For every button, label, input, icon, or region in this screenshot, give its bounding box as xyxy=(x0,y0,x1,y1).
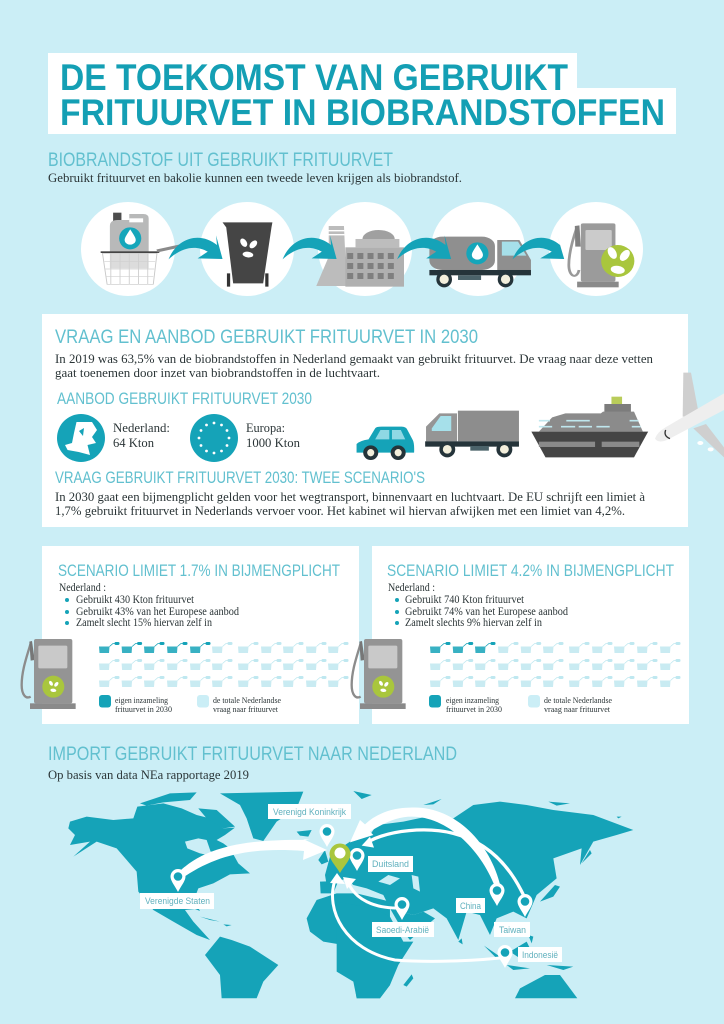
text block: 2019 xyxy=(55,351,653,380)
label: Verenigd Koninkrijk: Verenigd Koninkrijk xyxy=(273,807,346,817)
icon: recycling bin xyxy=(223,222,272,287)
list: scenario 1.7%: Gebruikt 430 Kton frituurvet xyxy=(76,594,195,606)
list: scenario 4.2%: Gebruikt 74% van het Europese aanbod xyxy=(405,606,568,618)
label: Indonesië: Indonesië xyxy=(522,950,558,960)
list: scenario 4.2%: Nederland : xyxy=(388,582,435,594)
icon: truck xyxy=(425,411,519,457)
list: scenario 1.7%: Nederland : xyxy=(59,582,106,594)
panel: vraag en aanbod xyxy=(42,314,688,527)
legend: scenario 1.7% xyxy=(99,695,281,714)
arrow: Indonesië xyxy=(330,873,500,961)
list: scenario 1.7%: Zamelt slecht 15% hiervan zelf in xyxy=(76,617,212,629)
title: FRITUURVET IN BIOBRANDSTOFFEN xyxy=(60,92,665,133)
Greenland xyxy=(220,792,303,841)
Arabia xyxy=(390,908,435,940)
label: Duitsland: Duitsland xyxy=(372,859,409,869)
arrow 4 xyxy=(512,235,564,259)
icon: car xyxy=(357,427,414,460)
Japan xyxy=(540,850,592,902)
text block: 2019: In 2019 was 63,5% van de biobrandstoffen in Nederland gemaakt van gebruikt frituurvet. De vraag naar deze vetten xyxy=(55,351,653,366)
legend: scenario 1.7%: eigen inzameling xyxy=(115,695,169,705)
pin: Verenigd Koninkrijk xyxy=(320,824,334,847)
list: scenario 1.7%: Gebruikt 43% van het Europese aanbod xyxy=(76,606,239,618)
legend: scenario 1.7%: frituurvet in 2030 xyxy=(115,704,172,714)
text: Nederland aanbod: Nederland: xyxy=(113,420,170,435)
world map xyxy=(68,791,633,998)
icon: pump xyxy=(22,639,76,709)
Eurasia xyxy=(325,802,633,940)
arrow: Verenigde Staten xyxy=(175,839,327,879)
arrow: Saoedi-Arabië xyxy=(343,877,397,908)
Islands SE Asia xyxy=(484,942,573,970)
Africa xyxy=(307,893,390,998)
label: Verenigd Koninkrijk xyxy=(268,804,351,819)
icon: factory xyxy=(316,226,404,287)
text block: bijmengplicht: In 2030 gaat een bijmengplicht gelden voor het wegtransport, binnenvaart en luchtvaart. De EU schrijft een limiet à xyxy=(55,489,645,504)
pin: China xyxy=(490,883,504,906)
legend: scenario 1.7%: de totale Nederlandse xyxy=(213,695,281,705)
panel: scenario 1.7% xyxy=(22,546,359,724)
icon: jerrycan and basket xyxy=(101,213,180,284)
Australia xyxy=(515,975,577,998)
icon: Europa xyxy=(190,414,238,462)
icon: tanker truck xyxy=(429,237,531,287)
chart: baskets 4.2% xyxy=(430,642,680,687)
title: DE TOEKOMST VAN GEBRUIKT xyxy=(60,57,568,98)
Hudson Bay xyxy=(185,838,220,857)
Iberia xyxy=(320,881,338,893)
legend: scenario 4.2%: de totale Nederlandse xyxy=(544,695,612,705)
pin: Taiwan xyxy=(518,894,532,917)
list: scenario 4.2%: Zamelt slechts 9% hiervan zelf in xyxy=(405,617,542,629)
label: China: China xyxy=(460,901,481,911)
text block: bijmengplicht: 1,7% gebruikt frituurvet in Nederlands vervoer voor. Het kabinet wil hiervan afwijken met een limiet van 4,2%. xyxy=(55,503,625,518)
heading: vraag en aanbod: VRAAG EN AANBOD GEBRUIKT FRITUURVET IN 2030 xyxy=(55,326,478,348)
icon: Nederland xyxy=(57,414,105,462)
arrow 1 xyxy=(169,235,223,259)
text: bron: Op basis van data NEa rapportage 2019 xyxy=(48,768,249,782)
text: Nederland aanbod: 64 Kton xyxy=(113,435,154,450)
list: scenario 4.2% xyxy=(388,582,568,629)
pin: Duitsland xyxy=(350,848,364,871)
label: Indonesië xyxy=(518,947,562,962)
text block: 2019: gaat toenemen door inzet van biobrandstoffen in de luchtvaart. xyxy=(55,365,380,380)
heading: import: IMPORT GEBRUIKT FRITUURVET NAAR NEDERLAND xyxy=(48,744,457,765)
legend: scenario 4.2%: eigen inzameling xyxy=(446,695,500,705)
arrows xyxy=(175,808,525,961)
panel: scenario 4.2% xyxy=(352,546,689,724)
intro text: Gebruikt frituurvet en bakolie kunnen een tweede leven krijgen als biobrandstof. xyxy=(48,171,462,185)
text block: bijmengplicht xyxy=(55,489,645,518)
process flow xyxy=(81,202,643,296)
pin: Saoedi-Arabië xyxy=(394,897,410,920)
icon: airplane xyxy=(655,373,724,457)
heading: twee scenario's: VRAAG GEBRUIKT FRITUURVET 2030: TWEE SCENARIO'S xyxy=(55,469,425,487)
North America xyxy=(68,803,250,940)
list: scenario 4.2%: Gebruikt 740 Kton frituurvet xyxy=(405,594,525,606)
pin: Verenigde Staten xyxy=(170,869,186,892)
label: Verenigde Staten xyxy=(140,893,214,909)
arrow: China xyxy=(350,808,501,887)
arrow: Taiwan xyxy=(362,830,525,898)
pin: Nederland xyxy=(330,844,350,873)
icon: pump xyxy=(352,639,406,709)
text: Nederland aanbod xyxy=(113,420,170,450)
heading: biobrandstof: BIOBRANDSTOF UIT GEBRUIKT FRITUURVET xyxy=(48,150,393,171)
Black Sea and Caspian xyxy=(378,875,420,892)
label: China xyxy=(456,898,485,913)
list: scenario 1.7% xyxy=(59,582,239,629)
label: Taiwan: Taiwan xyxy=(499,925,526,935)
South America xyxy=(205,937,278,998)
arrow 3 xyxy=(397,235,451,259)
icon: fuel pump xyxy=(569,223,634,287)
legend: scenario 4.2% xyxy=(429,695,612,714)
title xyxy=(48,53,676,134)
text: Europa aanbod: Europa: xyxy=(246,420,285,435)
Africa east xyxy=(337,902,413,998)
label: Saoedi-Arabië: Saoedi-Arabië xyxy=(376,925,429,935)
heading: scenario 1.7%: SCENARIO LIMIET 1.7% IN BIJMENGPLICHT xyxy=(58,561,340,580)
arrow 2 xyxy=(283,235,337,259)
chart: baskets 1.7% xyxy=(99,642,348,687)
label: Saoedi-Arabië xyxy=(372,922,434,937)
label: Taiwan xyxy=(494,922,530,937)
label: Duitsland xyxy=(368,856,413,872)
legend: scenario 4.2%: frituurvet in 2030 xyxy=(446,704,502,714)
icon: ship xyxy=(531,397,648,457)
heading: aanbod: AANBOD GEBRUIKT FRITUURVET 2030 xyxy=(57,390,312,408)
pin: Indonesië xyxy=(498,945,512,968)
Iceland and UK xyxy=(297,830,328,864)
legend: scenario 1.7%: vraag naar frituurvet xyxy=(213,704,279,714)
label: Verenigde Staten: Verenigde Staten xyxy=(145,896,210,906)
text: Europa aanbod xyxy=(246,420,300,450)
legend: scenario 4.2%: vraag naar frituurvet xyxy=(544,704,611,714)
text: Europa aanbod: 1000 Kton xyxy=(246,435,300,450)
